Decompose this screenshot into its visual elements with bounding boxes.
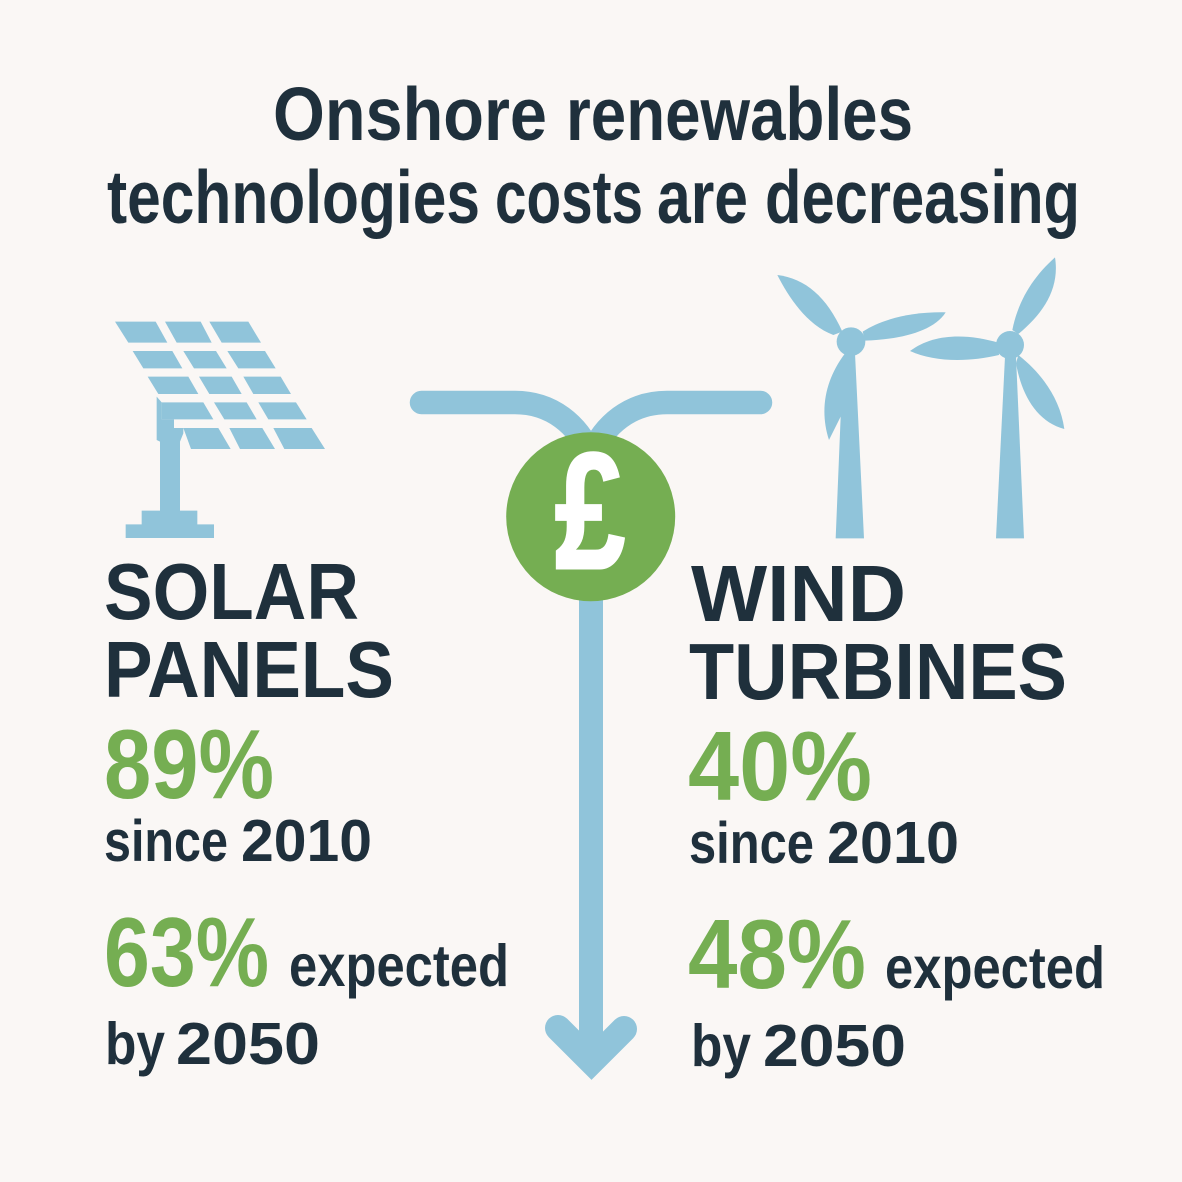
stat: 63% expected by 2050: expected (289, 933, 509, 999)
stat: 48% expected by 2050: 48% (688, 899, 866, 1009)
stat: 48% expected by 2050: expected (885, 935, 1105, 1001)
heading: wind turbines (689, 549, 1067, 716)
panel: solar panels (104, 547, 509, 1077)
title: decreasing (765, 155, 1080, 239)
heading: solar panels: PANELS (104, 625, 394, 714)
stat: 89% since 2010: since (104, 809, 228, 874)
heading: solar panels (104, 547, 394, 714)
stat: 63% expected by 2050: 2050 (176, 1011, 320, 1077)
title: technologies (107, 155, 480, 239)
title: costs (495, 155, 643, 239)
stat: 40% since 2010 (688, 711, 959, 876)
icon: wind turbines (777, 257, 1064, 538)
stat: 63% expected by 2050 (104, 897, 509, 1077)
title: are (657, 155, 748, 239)
stat: 40% since 2010: 40% (688, 711, 872, 821)
title (107, 72, 1080, 239)
title: Onshore (273, 72, 547, 156)
stat: 48% expected by 2050: 2050 (763, 1013, 906, 1079)
stat: 63% expected by 2050: by (105, 1011, 165, 1077)
stat: 63% expected by 2050: 63% (104, 897, 269, 1007)
left turbine (777, 275, 946, 538)
title: renewables (566, 72, 913, 156)
stat: 48% expected by 2050: by (691, 1013, 751, 1079)
right turbine (910, 257, 1064, 538)
stat: 40% since 2010: 2010 (827, 810, 959, 876)
arrow: cost pipes merging and pointing down (422, 402, 760, 1062)
icon: pound coin: £ (555, 419, 625, 603)
stat: 89% since 2010: 2010 (241, 808, 372, 874)
stat: 48% expected by 2050 (688, 899, 1105, 1079)
panel: wind turbines (688, 549, 1105, 1079)
icon: solar panel (115, 322, 325, 538)
heading: solar panels: SOLAR (104, 547, 359, 636)
stat: 89% since 2010 (104, 709, 372, 874)
heading: wind turbines: TURBINES (689, 627, 1067, 716)
stat: 40% since 2010: since (689, 811, 814, 876)
icon: pound coin (506, 419, 675, 603)
heading: wind turbines: WIND (691, 549, 906, 638)
stat: 89% since 2010: 89% (104, 709, 274, 819)
